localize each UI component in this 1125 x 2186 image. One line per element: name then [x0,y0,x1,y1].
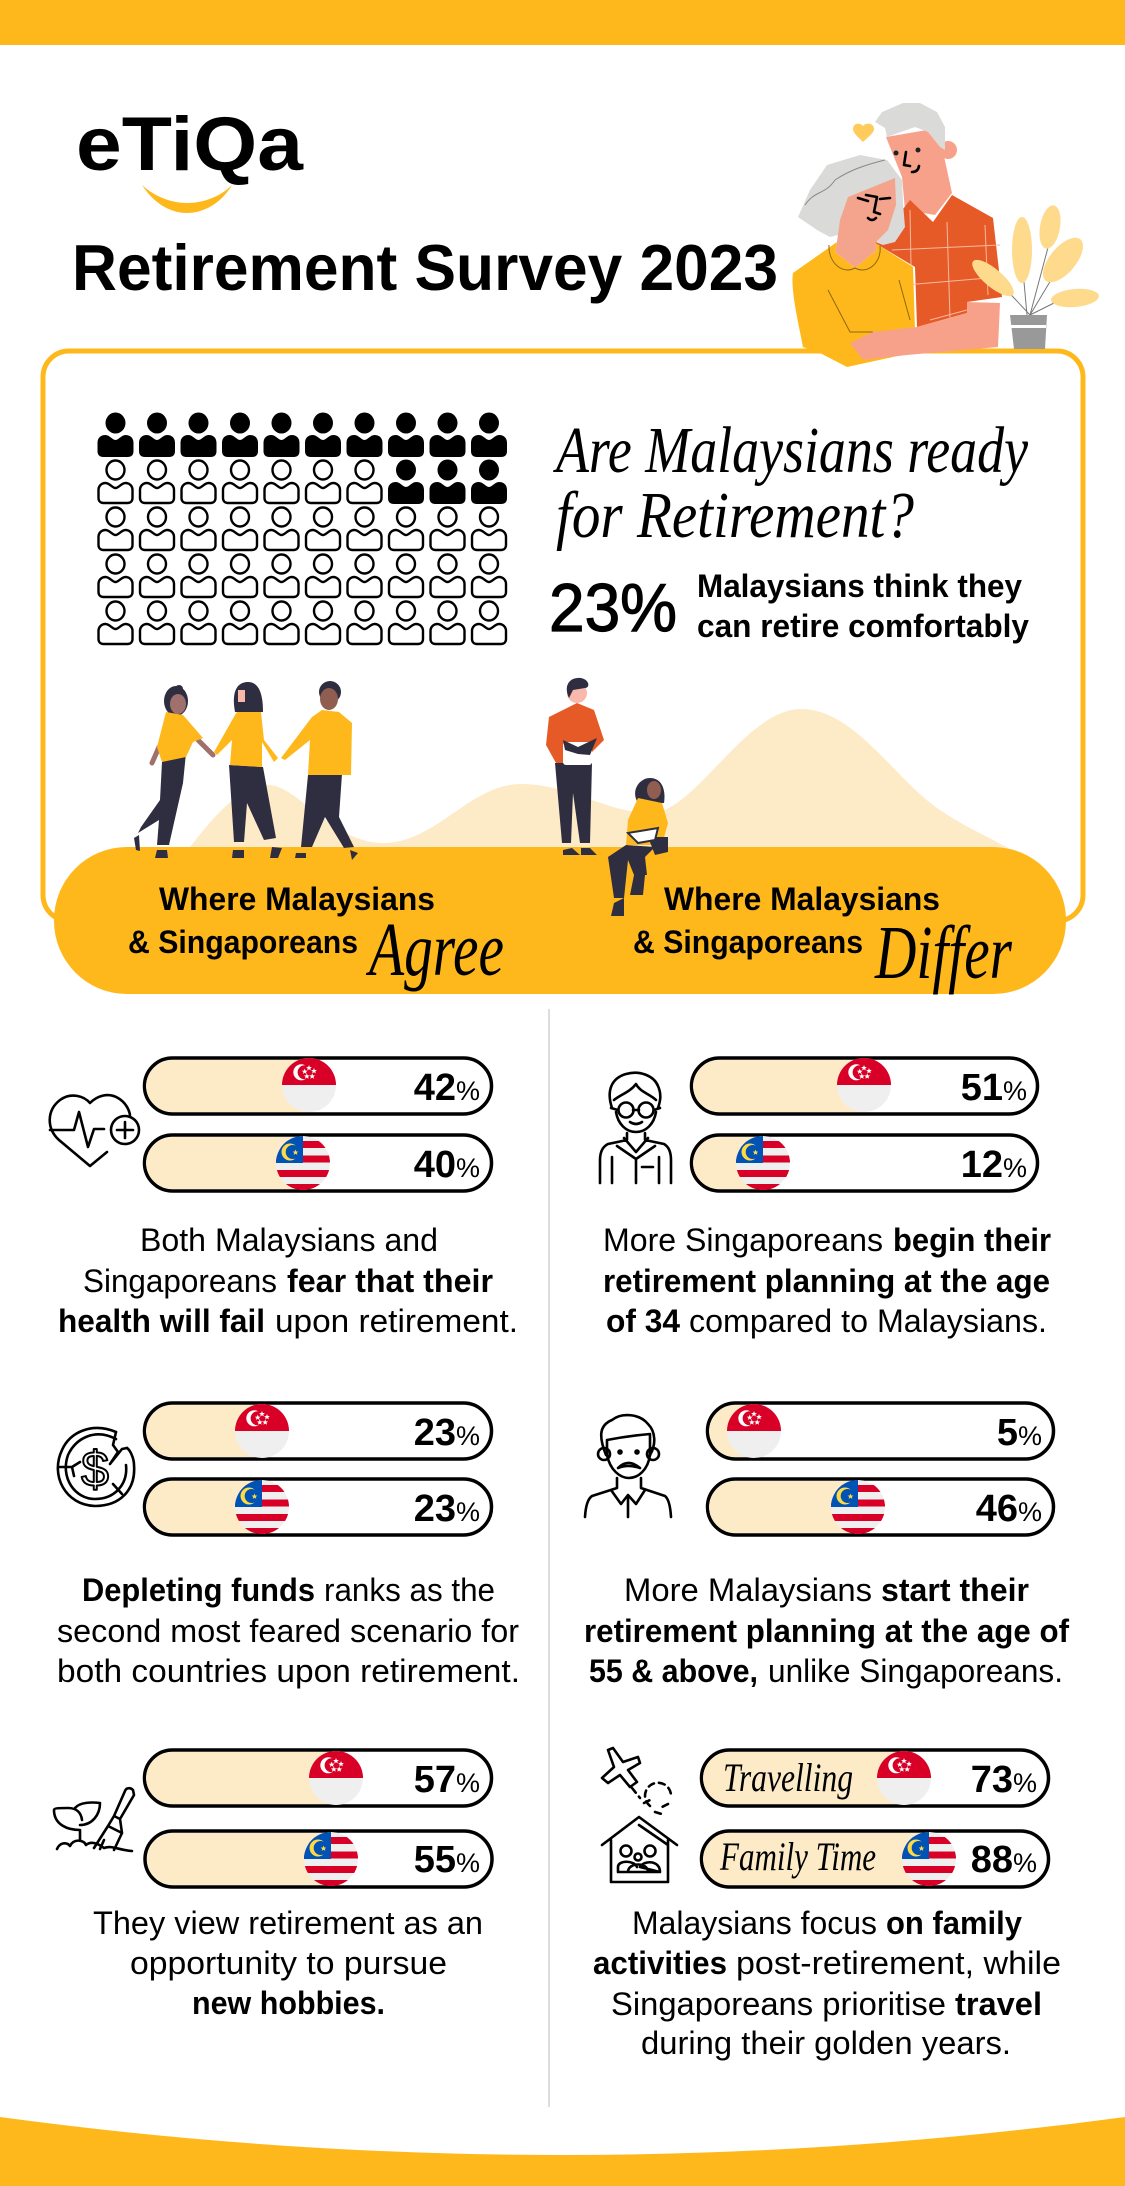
description: Singaporeans [83,1263,277,1299]
panel: health fear [50,1058,518,1339]
bar: travelling, Singapore 73 percent: Travelling [723,1755,853,1800]
bar: Malaysia 23 percent: 23% [414,1488,480,1530]
description: compared to Malaysians. [689,1303,1047,1339]
bar: Singapore 5 percent [708,1403,1054,1459]
panel: early planners [600,1058,1051,1339]
icon: potted plant [967,204,1100,349]
bar: travelling, Singapore 73 percent: 73% [971,1759,1037,1801]
stat description [697,568,1029,644]
bar: Malaysia 12 percent [692,1135,1038,1191]
bar: Singapore 57 percent: 57% [414,1759,480,1801]
bar: Malaysia 55 percent [145,1831,492,1887]
bar: Singapore 23 percent [144,1403,492,1459]
description: retirement planning at the age [603,1263,1050,1299]
description: post-retirement, while [736,1945,1061,1981]
icon: plane with dashed route [602,1748,671,1815]
icon grid: 23 of 100 people [98,412,507,644]
bar: travelling, Singapore 73 percent [702,1750,1048,1806]
stat: 23 percent: 23% [549,570,677,646]
description: begin their [893,1222,1051,1258]
icon: heart above couple [853,124,874,142]
description: retirement planning at the age of [584,1613,1069,1649]
icon: heart with pulse [50,1095,139,1166]
yellow heading pill [54,847,1066,994]
description: Both Malaysians and [140,1222,438,1258]
top yellow band [0,0,1125,45]
description: fear that their [287,1263,493,1299]
icon: man with glasses [600,1073,671,1183]
illustration: standing man with book [546,678,604,855]
bar: Singapore 51 percent [692,1058,1038,1114]
description: Depleting funds [82,1572,315,1608]
description: unlike Singaporeans. [768,1653,1063,1689]
heading: where they agree: Where Malaysians [159,881,435,917]
icon: seedling and trowel [54,1788,134,1851]
description: during their golden years. [641,2025,1011,2061]
bar: Singapore 42 percent: 42% [414,1067,480,1109]
description: ranks as the [324,1572,495,1608]
description [57,1572,520,1689]
description: opportunity to pursue [130,1945,447,1981]
bar: family time, Malaysia 88 percent: 88% [971,1839,1037,1881]
bar: Malaysia 46 percent [708,1479,1054,1535]
description: second most feared scenario for [57,1613,519,1649]
panel: survey question [43,351,1083,921]
heading: are Malaysians ready: Are Malaysians ready [553,414,1029,487]
bar: Malaysia 40 percent: 40% [414,1144,480,1186]
stat description: can retire comfortably [697,608,1029,644]
bar: Malaysia 55 percent: 55% [414,1839,480,1881]
description: More Malaysians [624,1572,872,1608]
bar: Singapore 23 percent: 23% [414,1412,480,1454]
bottom yellow curved band [0,2117,1125,2186]
panel: depleting funds [57,1403,520,1689]
description: start their [881,1572,1029,1608]
description [58,1222,518,1339]
heading: where they agree: Agree [365,908,504,992]
heading: where they agree: & Singaporeans [128,924,358,960]
description: of 34 [606,1303,680,1339]
bar: Singapore 5 percent: 5% [997,1412,1042,1454]
description [93,1905,483,2021]
panel: new hobbies [54,1750,492,2021]
stat description: Malaysians think they [697,568,1022,604]
description: on family [886,1905,1022,1941]
bar: Malaysia 23 percent [144,1479,492,1535]
panel: late planners [584,1403,1069,1689]
hills backdrop [189,709,1008,848]
heading: are Malaysians ready [553,414,1029,552]
heading: where they differ: Where Malaysians [664,881,940,917]
heading: where they differ [633,881,1012,995]
description: 55 & above, [589,1653,758,1689]
bar: Malaysia 12 percent: 12% [961,1144,1027,1186]
illustration: retired couple [792,103,1100,367]
bar: family time, Malaysia 88 percent [702,1831,1048,1887]
description: Singaporeans prioritise [611,1986,946,2022]
title: Retirement Survey 2023 [72,231,778,304]
icon: man with moustache [585,1415,671,1517]
icon: house with family [602,1817,677,1882]
heading: where they agree [128,881,504,992]
bar: Singapore 51 percent: 51% [961,1067,1027,1109]
logo: Etiqa: eTiQa [76,102,304,187]
illustration: three people holding hands [134,681,358,860]
icon: broken coin: $ [81,1441,109,1497]
description: More Singaporeans [603,1222,883,1258]
illustration: seated woman reading [608,778,668,916]
description [593,1905,1061,2061]
bar: Malaysia 40 percent [144,1135,492,1191]
bar: Singapore 42 percent [144,1058,492,1114]
description: upon retirement. [275,1303,518,1339]
description: new hobbies. [192,1985,385,2021]
heading: where they differ: & Singaporeans [633,924,863,960]
icon: broken coin [58,1428,134,1506]
bar: family time, Malaysia 88 percent: Family Time [719,1834,876,1879]
description [603,1222,1051,1339]
panel: travel and family [593,1748,1061,2061]
bar: Malaysia 46 percent: 46% [976,1488,1042,1530]
heading: where they differ: Differ [874,911,1012,995]
description: They view retirement as an [93,1905,483,1941]
description: health will fail [58,1303,265,1339]
description [584,1572,1069,1689]
description: travel [955,1986,1042,2022]
bar: Singapore 57 percent [144,1750,492,1806]
description: both countries upon retirement. [57,1653,520,1689]
heading: are Malaysians ready: for Retirement? [556,479,914,552]
description: Malaysians focus [632,1905,877,1941]
description: activities [593,1945,727,1981]
